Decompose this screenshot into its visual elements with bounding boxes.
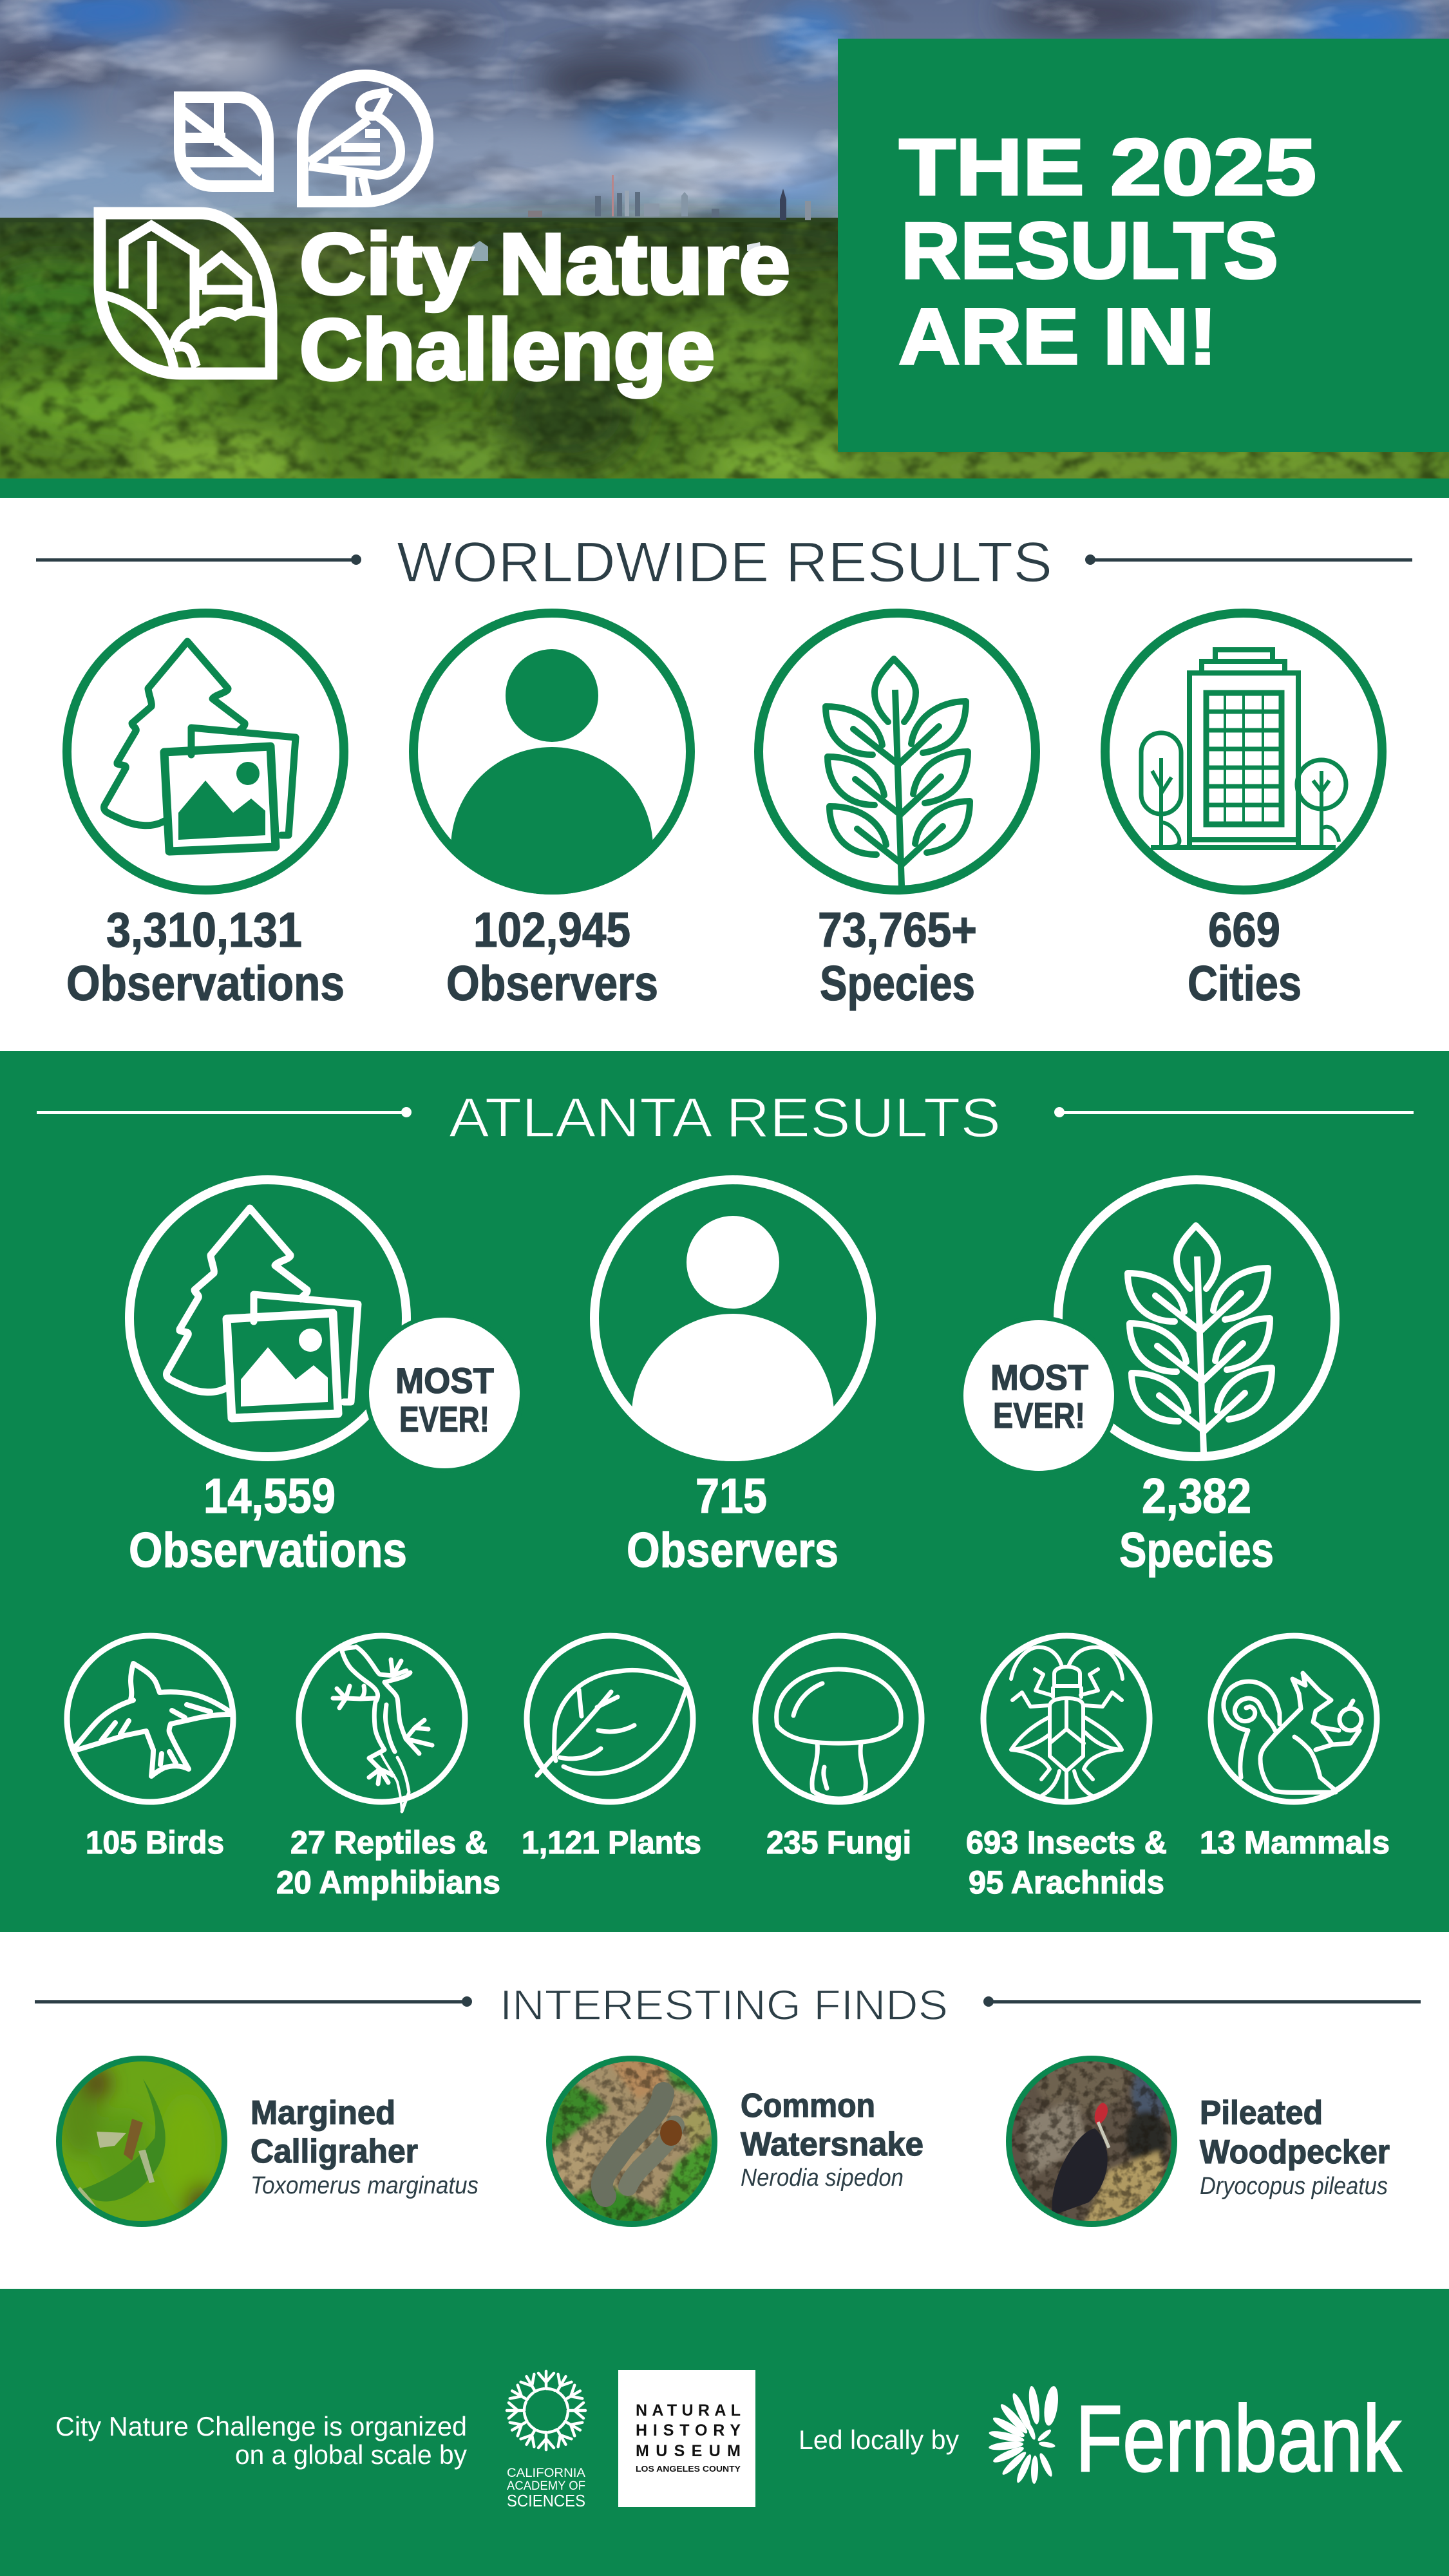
icon: lizard [333,1647,432,1812]
taxa: insects and arachnids [966,1636,1167,1900]
logo wordmark [299,216,790,398]
icon: city buildings [1141,650,1346,848]
green band beneath photo [0,478,1449,498]
find text: margined calligraher [251,2094,478,2199]
logo: natural history museum [618,2370,755,2507]
find: common watersnake photo [546,2056,717,2228]
taxa: reptiles and amphibians: 27 Reptiles & [290,1824,488,1861]
title panel [838,39,1449,452]
icon: bird tile [303,75,428,202]
find text: pileated woodpecker: Dryocopus pileatus [1200,2173,1388,2200]
stat: species [759,613,1036,1011]
taxa: plants [522,1636,701,1861]
heading: worldwide results: WORLDWIDE RESULTS [397,530,1052,594]
stat: cities [1105,613,1382,1011]
find: margined calligrapher hoverfly photo [56,2056,227,2227]
find text: common watersnake [741,2087,923,2192]
title text: RESULTS [901,207,1278,296]
heading: atlanta results: ATLANTA RESULTS [449,1087,1001,1149]
stat: atlanta species: 2,382 [1142,1469,1251,1524]
taxa: birds: 105 Birds [86,1824,224,1861]
logo: natural history museum: LOS ANGELES COUNTY [636,2464,741,2474]
stat: observers [413,613,690,1011]
title text: THE 2025 [899,123,1316,212]
heading: worldwide results [36,530,1412,594]
find text: common watersnake: Common [741,2087,875,2125]
taxa: mammals: 13 Mammals [1200,1824,1390,1861]
stat: observations: Observations [66,956,345,1011]
stat: atlanta observations: Observations [129,1523,407,1578]
find text: pileated woodpecker [1200,2094,1390,2200]
stat: observations [66,613,345,1011]
header photo: skyline and forest [0,0,1449,496]
taxa: birds [67,1636,233,1861]
icon: fern spiral [988,2385,1060,2484]
stat: atlanta observations: 14,559 [204,1469,336,1524]
heading: interesting finds [35,1981,1421,2029]
stat: atlanta observers [594,1180,871,1578]
panel: interesting finds [35,1981,1421,2229]
logo: natural history museum: HISTORY [636,2421,741,2439]
title text [898,123,1316,381]
stat: atlanta species [1058,1180,1335,1578]
callout: most ever observations: EVER! [399,1399,489,1439]
find text: margined calligraher: Margined [251,2094,395,2132]
taxa: fungi: 235 Fungi [766,1824,911,1861]
find text: margined calligraher: Toxomerus marginatus [251,2172,478,2199]
icon: leaf tile [180,93,268,186]
heading: atlanta results [37,1087,1414,1149]
callout: most ever observations [365,1313,524,1473]
logo wordmark: City Nature [299,216,790,312]
logo: natural history museum: NATURAL [636,2401,741,2420]
panel: atlanta results [0,1051,1449,1932]
callout: most ever species: MOST [990,1357,1088,1397]
find text: common watersnake: Watersnake [741,2126,923,2163]
taxa: insects and arachnids: 95 Arachnids [969,1864,1164,1900]
stat: atlanta observations [129,1180,407,1578]
stat: cities: 669 [1208,903,1280,958]
logo: california academy of sciences: ACADEMY OF [507,2479,585,2493]
stat: cities: Cities [1188,956,1302,1011]
taxa: plants: 1,121 Plants [522,1824,701,1861]
taxa: insects and arachnids: 693 Insects & [966,1824,1167,1861]
stat: atlanta species: Species [1119,1523,1274,1578]
icon: squirrel [1224,1673,1361,1792]
stat: observers: Observers [446,956,658,1011]
icon: house tile [100,213,271,374]
taxa: reptiles and amphibians [276,1636,500,1900]
taxa: mammals [1200,1636,1390,1861]
City Nature Challenge logo [100,75,790,398]
stat: observers: 102,945 [473,903,630,958]
organizer statement [55,2411,467,2470]
led locally statement: Led locally by [799,2425,959,2455]
icon: beetle [1011,1647,1122,1799]
icon: leaf [537,1670,687,1776]
panel: worldwide results [36,530,1412,1011]
logo: natural history museum: MUSEUM [636,2442,741,2460]
organizer statement: City Nature Challenge is organized [55,2411,467,2441]
stat: atlanta observers: 715 [696,1469,767,1524]
find: pileated woodpecker photo [1006,2054,1177,2229]
logo: california academy of sciences: CALIFORNIA [507,2467,585,2480]
organizer statement: on a global scale by [235,2439,467,2470]
logo: california academy of sciences: SCIENCES [507,2491,585,2510]
title text: ARE IN! [898,292,1217,381]
callout: most ever observations: MOST [395,1360,494,1401]
taxa: fungi [755,1636,922,1861]
find text: pileated woodpecker: Woodpecker [1200,2134,1390,2171]
callout: most ever species: EVER! [993,1395,1085,1435]
logo wordmark: Challenge [299,302,715,398]
stat: observations: 3,310,131 [106,903,302,958]
heading: interesting finds: INTERESTING FINDS [500,1981,948,2029]
panel: footer [0,2289,1449,2576]
logo: california academy of sciences [507,2371,585,2510]
find text: common watersnake: Nerodia sipedon [741,2164,904,2192]
icon: mushroom [777,1669,901,1799]
stat: species: Species [820,956,975,1011]
callout: most ever species [959,1316,1119,1475]
taxa: reptiles and amphibians: 20 Amphibians [276,1864,500,1900]
stat: atlanta observers: Observers [627,1523,838,1578]
find text: margined calligraher: Calligraher [251,2133,418,2170]
stat: species: 73,765+ [818,903,977,958]
find text: pileated woodpecker: Pileated [1200,2094,1323,2132]
icon: bird [75,1663,230,1776]
